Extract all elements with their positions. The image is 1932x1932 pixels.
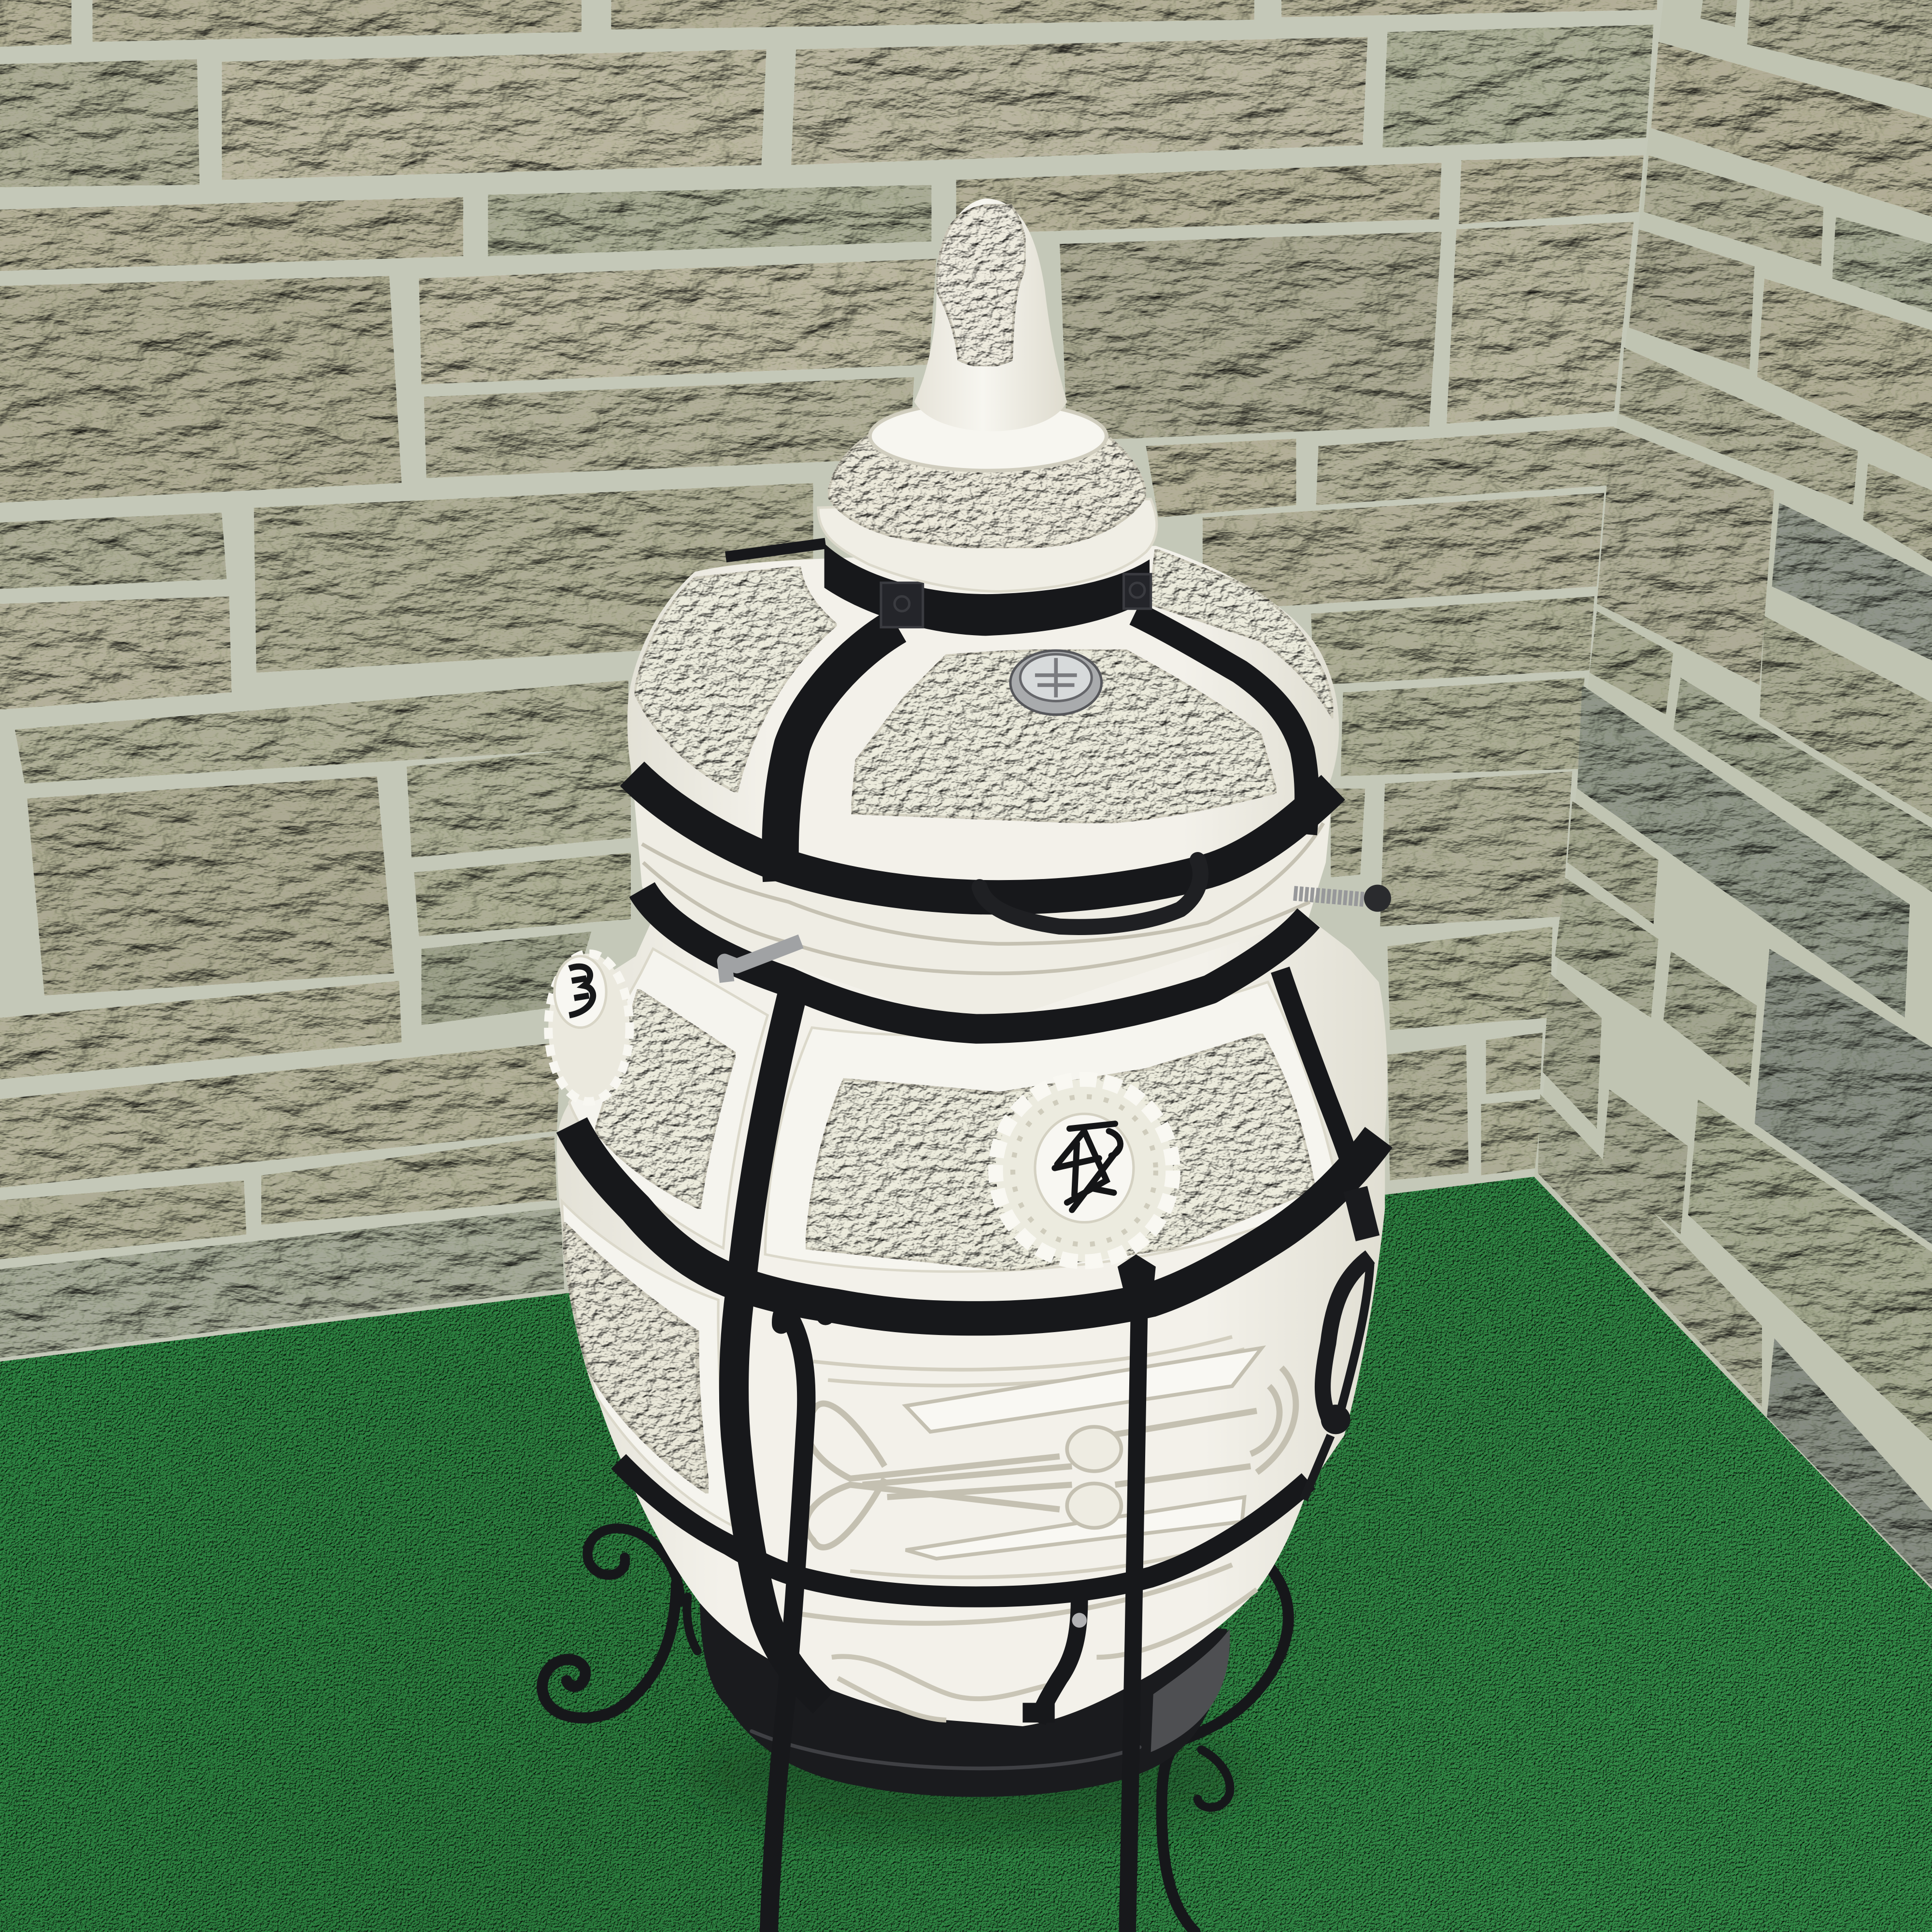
lid iron handle <box>980 860 1201 927</box>
central rosette medallion with logo <box>995 1080 1173 1262</box>
cap plate <box>870 402 1107 470</box>
lower left panel frame <box>562 1201 732 1525</box>
neck between lid and body <box>632 774 1333 1029</box>
lid: left textured panel <box>635 567 837 792</box>
left upper panel frame <box>569 949 767 1248</box>
collar left bracket <box>881 583 923 627</box>
lid: right textured panel <box>1150 550 1333 718</box>
strap: lid lower belt <box>632 774 1333 897</box>
strap: lid left arc <box>781 626 897 881</box>
right door and hanging hook <box>1304 1189 1370 1500</box>
collar right bracket <box>1124 574 1151 609</box>
lower relief ornament: knives <box>906 1348 1262 1559</box>
wrought-iron stand <box>542 1528 1288 1932</box>
strap: right vertical <box>1280 970 1355 1177</box>
stand: grey ash pan <box>1151 1629 1230 1752</box>
strap: body collar belt <box>642 890 1308 1029</box>
floor shadow under tandoor <box>690 1713 1257 1836</box>
lid: central textured panel <box>852 650 1277 823</box>
body shell <box>554 918 1387 1726</box>
strap: thin top back <box>726 543 825 557</box>
stand: base ring rim <box>752 1731 1140 1768</box>
strap: left vertical <box>734 989 823 1703</box>
central upper textured panel <box>806 1034 1315 1270</box>
strap: lower belt <box>619 1462 1308 1597</box>
domed lid <box>627 546 1339 902</box>
stand: right hoop leg <box>1162 1565 1288 1932</box>
lower left textured panel <box>563 1222 709 1493</box>
left rosette medallion <box>548 953 630 1102</box>
lower vent latch <box>1023 1599 1087 1722</box>
finial head detail <box>937 204 1025 366</box>
green artificial grass floor <box>0 1177 1932 1932</box>
right brick wall <box>1534 0 1932 1590</box>
hanging poker <box>1118 1254 1156 1932</box>
bottom relief ornament <box>801 1565 1257 1720</box>
hanging tongs <box>769 1295 825 1932</box>
stand: right small curl <box>1198 1749 1230 1807</box>
lower relief ornament: band grooves <box>813 1337 1245 1577</box>
cap textured dome <box>828 429 1146 548</box>
collar black band <box>824 543 1150 636</box>
right latch pin <box>1294 885 1391 912</box>
tandoor clay body <box>548 774 1387 1726</box>
back brick wall <box>0 0 1676 1368</box>
lid thermometer <box>1010 651 1102 715</box>
strap: middle belt <box>572 1125 1379 1319</box>
strap: lid right arc <box>1135 613 1307 834</box>
stand: inner left leg <box>687 1597 697 1651</box>
lid shell <box>627 546 1339 902</box>
lid cap with horse-head finial <box>818 199 1157 636</box>
central upper panel frame <box>765 982 1338 1272</box>
horse-head finial <box>914 199 1067 431</box>
lower relief ornament: tongs and scissors <box>806 1368 1296 1548</box>
neck seam lines <box>642 823 1323 973</box>
stand: upper left curl <box>587 1528 680 1602</box>
iron straps <box>572 543 1379 1703</box>
stand: base bowl <box>700 1597 1227 1797</box>
left upper textured panel <box>595 989 736 1209</box>
lower relief ornament: knobs <box>1067 1427 1121 1528</box>
cap ring <box>818 499 1157 591</box>
left latch hook <box>724 941 801 982</box>
stand: lower left curl <box>542 1583 677 1718</box>
